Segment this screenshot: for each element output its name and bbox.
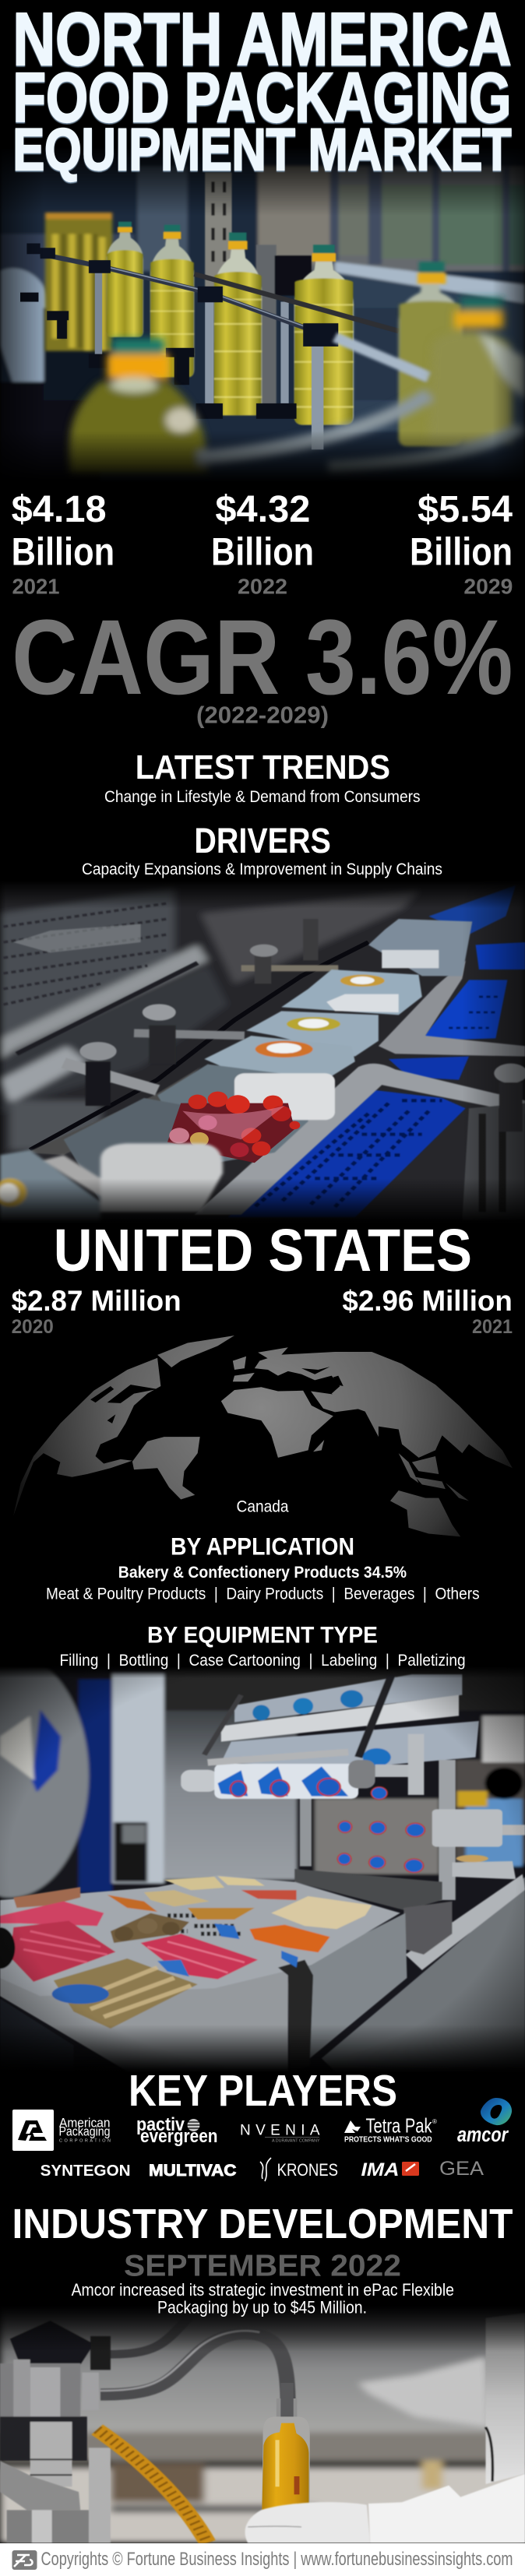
- key players: [12, 2066, 512, 2181]
- by equipment type: [59, 1623, 466, 1670]
- by equipment type: BY EQUIPMENT TYPE: [147, 1623, 378, 1649]
- film feed: [181, 1674, 525, 1900]
- hudson bay and lakes: [90, 1385, 157, 1423]
- drivers: [82, 821, 442, 878]
- stat 2022: 2022: [238, 575, 287, 598]
- arabia: [311, 1392, 361, 1412]
- photo: oil bottles on a filling line: [0, 145, 525, 487]
- south america: [132, 1437, 200, 1499]
- indonesia: [399, 1453, 469, 1501]
- logo: syntegon: SYNTEGON: [41, 2163, 131, 2180]
- industry development: SEPTEMBER 2022: [124, 2250, 401, 2283]
- british isles: [233, 1357, 246, 1370]
- logo: ima: IMA: [361, 2159, 399, 2180]
- logo: amcor: amcor: [457, 2123, 509, 2146]
- logo: krones: KRONES: [277, 2160, 338, 2180]
- world globe map: [13, 1336, 513, 1536]
- stat 2022: $4.32: [215, 489, 310, 530]
- logo: tetra pak: [344, 2114, 437, 2145]
- industry development: Packaging by up to $45 Million.: [157, 2298, 367, 2317]
- conveyor dark edge: [30, 942, 368, 1150]
- by application: Bakery & Confectionery Products 34.5%: [118, 1564, 407, 1582]
- greenland: [157, 1336, 234, 1367]
- united states section: [12, 1217, 513, 1338]
- drivers: DRIVERS: [194, 821, 331, 860]
- industry development: Amcor increased its strategic investment in ePac Flexible: [72, 2280, 454, 2300]
- united states section: $2.87 Million: [12, 1285, 181, 1317]
- posts and rods: [20, 243, 399, 449]
- by application: Meat & Poultry Products | Dairy Products | Beverages | Others: [46, 1585, 480, 1603]
- logo: tetra pak: PROTECTS WHAT'S GOOD: [344, 2136, 432, 2145]
- logo: amcor: [457, 2098, 512, 2146]
- metal rails and knobs: [26, 919, 525, 1220]
- africa: [221, 1387, 333, 1458]
- logo: pactiv evergreen: [136, 2114, 218, 2147]
- logo: american packaging: American: [59, 2116, 111, 2131]
- logo: pactiv evergreen: pactiv: [136, 2114, 185, 2135]
- by application: [46, 1533, 480, 1603]
- latest trends: Change in Lifestyle & Demand from Consumers: [104, 788, 421, 806]
- united states section: UNITED STATES: [54, 1217, 472, 1284]
- latest trends: [104, 748, 421, 806]
- canada label: Canada: [237, 1498, 289, 1515]
- bottles row: [107, 222, 354, 425]
- drivers: Capacity Expansions & Improvement in Supply Chains: [82, 860, 442, 878]
- madagascar: [313, 1440, 324, 1452]
- clear boxes with stickers: [64, 919, 472, 1202]
- logo: american packaging: Packaging: [59, 2124, 111, 2139]
- filling pipes: [100, 2327, 296, 2402]
- photo: tray sealing machine with packaged seafood: [0, 1653, 525, 2071]
- logo: multivac: MULTIVAC: [149, 2162, 237, 2180]
- latest trends: LATEST TRENDS: [136, 748, 390, 787]
- machine body: [0, 2321, 111, 2543]
- stat 2029: $5.54: [418, 489, 513, 530]
- stat 2021: 2021: [12, 575, 59, 598]
- stat 2021: Billion: [12, 530, 115, 574]
- stat 2021: $4.18: [12, 489, 107, 530]
- logo: nvenia: A DURAVANT COMPANY: [272, 2138, 320, 2143]
- logo: krones: [260, 2158, 338, 2181]
- europe and asia: [255, 1352, 513, 1468]
- united states section: $2.96 Million: [342, 1285, 513, 1317]
- blurred foreground bottles and rail: [335, 262, 462, 446]
- logo: pactiv evergreen: evergreen: [140, 2126, 218, 2147]
- industry development: [12, 2201, 513, 2317]
- scandinavia: [258, 1347, 288, 1358]
- australia: [390, 1490, 460, 1536]
- united states section: 2020: [12, 1316, 54, 1338]
- footer bar: [0, 2543, 525, 2576]
- united states section: 2021: [472, 1316, 513, 1338]
- gloved hand and sleeve: [245, 2313, 525, 2543]
- north america: [13, 1358, 160, 1516]
- tomatoes: [167, 1092, 300, 1163]
- logo: nvenia: NVENIA: [240, 2123, 320, 2139]
- title: [12, 0, 511, 183]
- blue conveyor belts: [227, 885, 525, 1217]
- by equipment type: Filling | Bottling | Case Cartooning | Labeling | Palletizing: [59, 1652, 466, 1670]
- orange belt: [97, 2430, 208, 2543]
- distant bottles: [45, 213, 112, 351]
- logo: american packaging: [12, 2110, 111, 2151]
- stat 2022: Billion: [211, 530, 314, 574]
- logo: tetra pak: ®: [432, 2118, 437, 2125]
- stat 2029: 2029: [463, 575, 513, 598]
- photo: filling nozzle and gloved hand with oil bottle: [0, 2305, 525, 2543]
- stat 2021: [12, 489, 115, 598]
- logo: tetra pak: Tetra Pak: [366, 2114, 432, 2138]
- stat 2022: [211, 489, 314, 598]
- black and caspian seas: [301, 1367, 344, 1386]
- iberia: [233, 1373, 255, 1381]
- stat 2029: [410, 489, 513, 598]
- heading: KEY PLAYERS: [129, 2066, 397, 2116]
- logo: ima: [361, 2159, 419, 2180]
- by application: BY APPLICATION: [171, 1533, 354, 1561]
- footer logo: [12, 2550, 37, 2570]
- mesh guard detail: [3, 903, 198, 1054]
- front tub and tray: [0, 1143, 223, 1223]
- market size stats: [12, 489, 513, 598]
- logo: american packaging: CORPORATION: [59, 2138, 111, 2143]
- oil bottle: [262, 2383, 310, 2510]
- table and packaged food: [0, 1869, 525, 2071]
- CAGR figure: (2022-2029): [196, 702, 329, 729]
- logo: gea: GEA: [439, 2158, 484, 2180]
- perforated column: [205, 172, 399, 405]
- photo: tomato trays on a blue conveyor: [0, 880, 525, 1223]
